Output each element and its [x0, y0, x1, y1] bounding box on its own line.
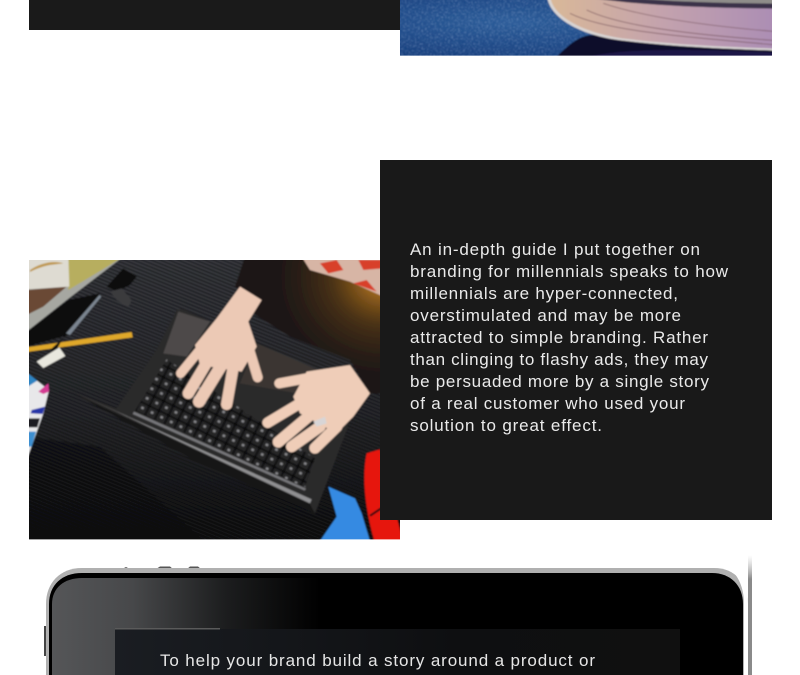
left hand [195, 287, 262, 372]
desk clutter top-left [27, 257, 123, 332]
text block: branding guide paragraph: attracted to simple branding. Rather [410, 328, 708, 347]
panel: top-left dark band [29, 0, 400, 30]
text block: branding guide paragraph: solution to great effect. [410, 416, 602, 435]
text block: branding guide paragraph [410, 240, 729, 435]
text block: branding guide paragraph: branding for millennials speaks to how [410, 262, 729, 281]
keyboard [135, 359, 315, 487]
panel: millennials branding text [380, 160, 772, 520]
photo: hands typing on a laptop [27, 257, 403, 543]
text block: tablet paragraph: To help your brand build a story around a product or [160, 651, 595, 670]
photo: open book on blue background [397, 0, 777, 60]
text block: branding guide paragraph: than clinging to flashy ads, they may [410, 350, 708, 369]
text block: branding guide paragraph: An in-depth guide I put together on [410, 240, 700, 259]
laptop body [75, 309, 355, 513]
right hand [293, 365, 370, 433]
colour swatch fan [29, 380, 50, 458]
text block: branding guide paragraph: of a real customer who used your [410, 394, 685, 413]
text block: branding guide paragraph: overstimulated and may be more [410, 306, 681, 325]
sleeve and warm light [235, 257, 383, 393]
text block: branding guide paragraph: millennials are hyper-connected, [410, 284, 678, 303]
text block: branding guide paragraph: be persuaded more by a single story [410, 372, 710, 391]
tablet device frame [44, 555, 752, 675]
tablet inner text panel [115, 628, 680, 675]
blue cloth and red object [318, 487, 371, 543]
patterned fabric [302, 260, 380, 296]
